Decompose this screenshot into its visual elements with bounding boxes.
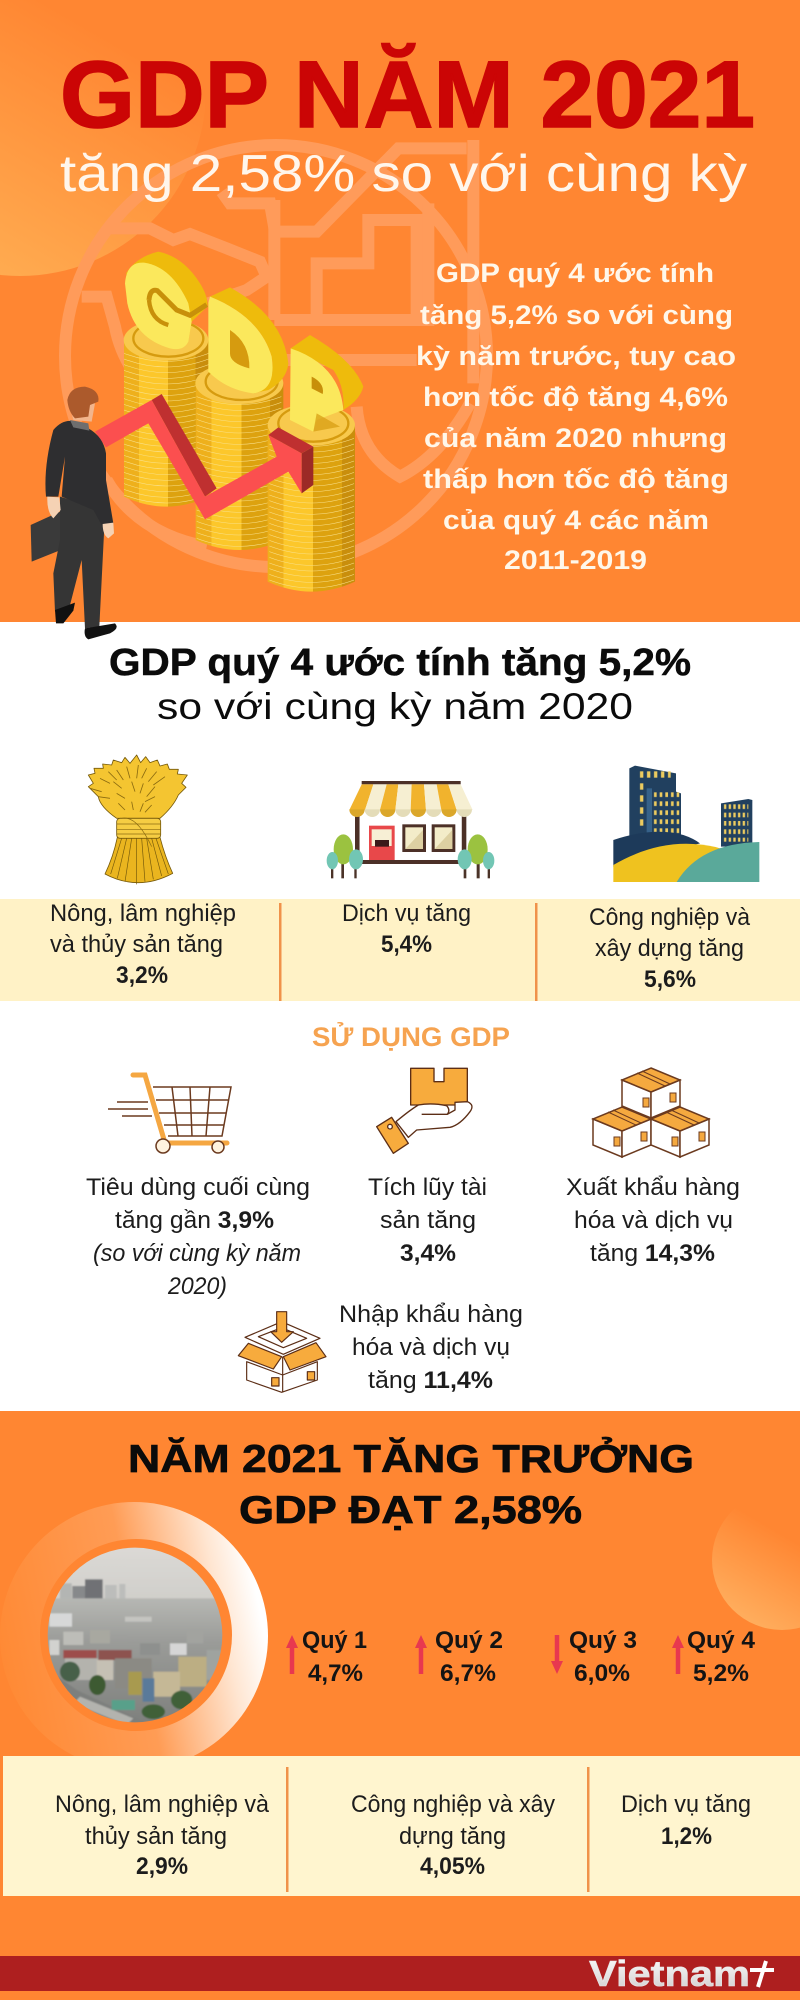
panel: full year sector strip <box>3 1756 800 1896</box>
heading: full year: GDP ĐẠT 2,58% <box>239 1489 582 1532</box>
heading: quarter 4 <box>109 642 691 727</box>
quarter 2 <box>415 1627 503 1687</box>
text: final consumption: (so với cùng kỳ năm <box>93 1240 301 1267</box>
icon: buildings and hills <box>613 766 759 882</box>
quarter 3: 6,0% <box>574 1660 630 1687</box>
text: agriculture: và thủy sản tăng <box>50 931 223 958</box>
text: services year <box>621 1791 751 1850</box>
text: industry year: dựng tăng <box>399 1823 506 1850</box>
text: imports: hóa và dịch vụ <box>352 1334 510 1361</box>
text: industry year: Công nghiệp và xây <box>351 1791 555 1818</box>
letter G <box>125 252 207 349</box>
text block: hero summary: kỳ năm trước, tuy cao <box>416 341 736 371</box>
icon: open box with arrow <box>238 1312 326 1392</box>
quarter 4: Quý 4 <box>687 1627 756 1654</box>
text: agriculture: 3,2% <box>116 962 168 989</box>
quarter 3 <box>551 1627 637 1687</box>
coin stack D <box>195 363 283 550</box>
quarter 4 <box>672 1627 756 1687</box>
text: agriculture <box>50 900 236 989</box>
icon: hand holding box <box>377 1068 472 1153</box>
letter P <box>290 335 363 432</box>
coin stack G <box>124 319 209 507</box>
text: agriculture year: thủy sản tăng <box>85 1823 227 1850</box>
text block: hero summary: GDP quý 4 ước tính <box>436 258 714 288</box>
text: services: 5,4% <box>381 931 432 958</box>
text: final consumption: 2020) <box>167 1273 227 1300</box>
decorative glow circle right <box>712 1490 800 1630</box>
text: industry year: 4,05% <box>420 1853 485 1880</box>
text: imports <box>339 1301 523 1394</box>
quarter 1: 4,7% <box>308 1660 363 1687</box>
heading: quarter 4: so với cùng kỳ năm 2020 <box>157 686 633 727</box>
text: final consumption: tăng gần 3,9% <box>115 1207 274 1234</box>
title: GDP NĂM 2021 <box>60 42 755 148</box>
quarter 3: Quý 3 <box>569 1627 637 1654</box>
panel: quarter 4 by sector <box>0 622 800 1411</box>
coin stack P <box>268 404 355 592</box>
text: agriculture: Nông, lâm nghiệp <box>50 900 236 927</box>
quarter 1: Quý 1 <box>302 1627 367 1654</box>
text: industry <box>589 904 751 993</box>
quarter 2: 6,7% <box>440 1660 496 1687</box>
text: capital accumulation: Tích lũy tài <box>368 1174 487 1201</box>
subtitle: tăng 2,58% so với cùng kỳ <box>60 145 747 203</box>
text: capital accumulation: sản tăng <box>380 1207 476 1234</box>
photo: hazy city <box>43 1543 227 1727</box>
text: agriculture year: 2,9% <box>136 1853 188 1880</box>
text: services: Dịch vụ tăng <box>342 900 471 927</box>
businessman <box>31 387 117 639</box>
text: services year: 1,2% <box>661 1823 712 1850</box>
icon: shop <box>327 781 494 878</box>
text block: hero summary: 2011-2019 <box>504 545 647 575</box>
text: exports: tăng 14,3% <box>590 1240 715 1267</box>
text: industry: 5,6% <box>644 966 696 993</box>
text: exports: Xuất khẩu hàng <box>566 1174 740 1201</box>
text: exports: hóa và dịch vụ <box>574 1207 733 1234</box>
heading: full year <box>128 1437 694 1532</box>
text block: hero summary <box>416 258 736 575</box>
globe and bar chart watermark <box>65 140 487 567</box>
text block: hero summary: thấp hơn tốc độ tăng <box>423 464 729 494</box>
panel: sector strip <box>0 899 800 1001</box>
text: exports <box>566 1174 740 1267</box>
logo: Vietnam+: Vietnam <box>589 1953 750 1994</box>
heading: full year: NĂM 2021 TĂNG TRƯỞNG <box>128 1437 694 1481</box>
text: capital accumulation <box>368 1174 487 1267</box>
arrow <box>95 394 313 519</box>
panel: top hero <box>0 0 800 622</box>
footer bar with logo <box>0 1953 800 1994</box>
quarter 1 <box>286 1627 367 1687</box>
letter D <box>208 287 288 393</box>
panel: full year growth <box>0 1411 800 2000</box>
circular ring and city photo <box>0 1502 268 1770</box>
icon: three boxes <box>593 1068 709 1157</box>
text: services <box>342 900 471 958</box>
text: services year: Dịch vụ tăng <box>621 1791 751 1818</box>
quarter 4: 5,2% <box>693 1660 749 1687</box>
text: industry: Công nghiệp và <box>589 904 751 931</box>
text: agriculture year <box>55 1791 270 1880</box>
background glow circle <box>0 0 206 276</box>
text block: hero summary: của năm 2020 nhưng <box>424 423 727 453</box>
icon: wheat sheaf <box>88 755 187 884</box>
text: final consumption <box>86 1174 310 1300</box>
text block: hero summary: tăng 5,2% so với cùng <box>420 300 733 330</box>
text: capital accumulation: 3,4% <box>400 1240 456 1267</box>
text: agriculture year: Nông, lâm nghiệp và <box>55 1791 270 1818</box>
text: imports: Nhập khẩu hàng <box>339 1301 523 1328</box>
text: imports: tăng 11,4% <box>368 1367 493 1394</box>
illustration: coin stacks, GDP letters, arrow and businessman <box>31 252 363 639</box>
text: final consumption: Tiêu dùng cuối cùng <box>86 1174 310 1201</box>
text block: hero summary: hơn tốc độ tăng 4,6% <box>423 382 728 412</box>
text: industry: xây dựng tăng <box>595 935 744 962</box>
heading: quarter 4: GDP quý 4 ước tính tăng 5,2% <box>109 642 691 684</box>
text: industry year <box>351 1791 555 1880</box>
quarter 2: Quý 2 <box>435 1627 503 1654</box>
heading: use of GDP: SỬ DỤNG GDP <box>312 1020 510 1052</box>
text block: hero summary: của quý 4 các năm <box>443 505 709 535</box>
icon: shopping cart <box>108 1075 231 1153</box>
